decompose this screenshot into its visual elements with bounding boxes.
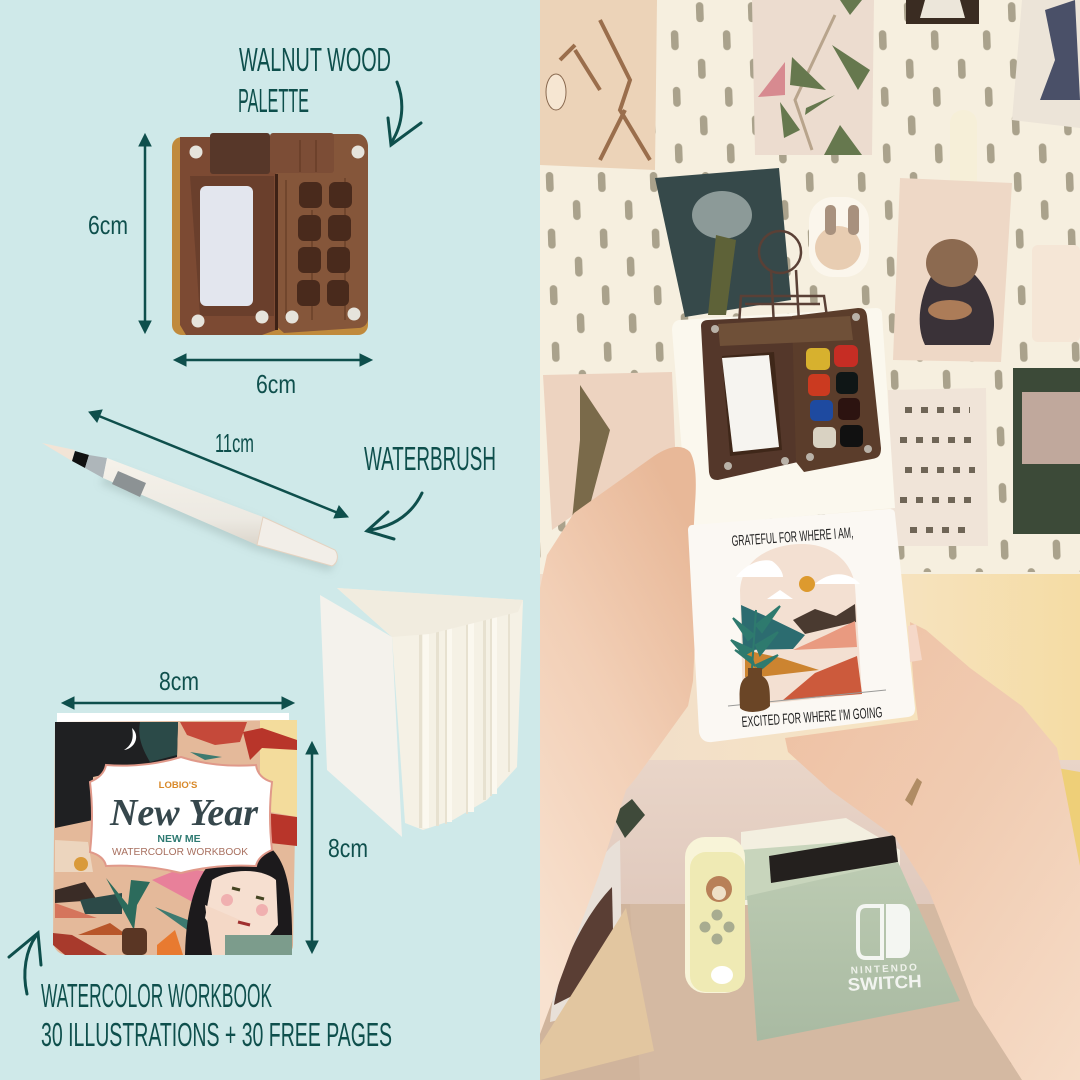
arrow: workbook width dimension xyxy=(62,697,294,709)
poster: dancer sketch xyxy=(543,372,676,530)
title plate on cover: NEW ME xyxy=(157,833,201,845)
title plate on cover: New Year xyxy=(109,792,259,834)
panel: right photo background xyxy=(540,0,1080,1080)
text: console logo xyxy=(847,962,922,995)
poster: figure top right xyxy=(1012,0,1080,128)
heading: waterbrush label: WATERBRUSH xyxy=(364,440,496,477)
text: watercolor workbook label: 30 ILLUSTRATIONS + 30 FREE PAGES xyxy=(41,1016,392,1053)
arrow: waterbrush length dimension xyxy=(89,410,348,518)
title plate on cover: WATERCOLOR WORKBOOK xyxy=(112,847,248,858)
arrow: palette label pointer xyxy=(388,82,421,145)
icon: switch logo xyxy=(858,904,910,958)
illustration: right hand xyxy=(785,622,1080,1080)
icon: walnut wood palette xyxy=(172,133,368,335)
icon: blank white notebook pages xyxy=(320,588,523,837)
panel: workbook page in photo xyxy=(688,509,915,742)
poster: leaf pattern xyxy=(888,388,988,546)
arrow: workbook label pointer xyxy=(9,933,41,994)
text: 6cm height: 6cm xyxy=(88,210,128,240)
text: console logo: SWITCH xyxy=(847,971,922,995)
poster: green building xyxy=(1013,368,1080,534)
arrow: palette height dimension xyxy=(139,134,151,333)
poster: pale pattern right xyxy=(1032,245,1080,342)
icon: palette held in photo xyxy=(701,308,881,480)
text: watercolor workbook label: WATERCOLOR WORKBOOK xyxy=(41,977,272,1014)
text: page bottom caption: EXCITED FOR WHERE I'M GOING xyxy=(741,704,883,731)
icon: waterbrush xyxy=(42,443,337,572)
text: 6cm width: 6cm xyxy=(256,369,296,399)
poster: dark forest xyxy=(655,168,791,317)
poster: small dark card top xyxy=(906,0,979,24)
text: page top caption: GRATEFUL FOR WHERE I AM, xyxy=(731,525,854,550)
text: 8cm width: 8cm xyxy=(159,666,199,696)
poster: creature sketch top left xyxy=(540,0,657,170)
object: game console dock xyxy=(685,818,960,1041)
heading: walnut wood palette label xyxy=(238,41,391,119)
text: console logo: NINTENDO xyxy=(851,962,919,977)
heading: walnut wood palette label: PALETTE xyxy=(238,82,309,119)
illustration: arch landscape xyxy=(728,544,886,712)
text: watercolor workbook label xyxy=(41,977,392,1053)
text: 8cm height: 8cm xyxy=(328,833,368,863)
heading: walnut wood palette label: WALNUT WOOD xyxy=(239,41,391,78)
object: shelf xyxy=(540,904,1080,1080)
arrow: palette width dimension xyxy=(174,354,372,366)
title plate on cover: LOBIO'S xyxy=(159,780,197,791)
object: metal binder clip xyxy=(738,231,830,345)
arrow: workbook height dimension xyxy=(306,742,318,953)
panel: left product background xyxy=(0,0,540,1080)
arrow: waterbrush label pointer xyxy=(367,493,422,539)
panel: workbook cover xyxy=(53,713,297,955)
object: white notebook backing xyxy=(672,308,895,526)
text: 11cm length: 11cm xyxy=(215,428,254,458)
poster: botanical top xyxy=(752,0,874,155)
illustration: left hand xyxy=(540,447,696,1034)
poster: creature troll xyxy=(893,178,1012,362)
poster: white clip on wall xyxy=(950,110,977,208)
title plate on cover xyxy=(90,757,272,873)
sticker: bunny xyxy=(809,197,869,277)
object: sunglasses and patterned jar xyxy=(550,799,645,1022)
